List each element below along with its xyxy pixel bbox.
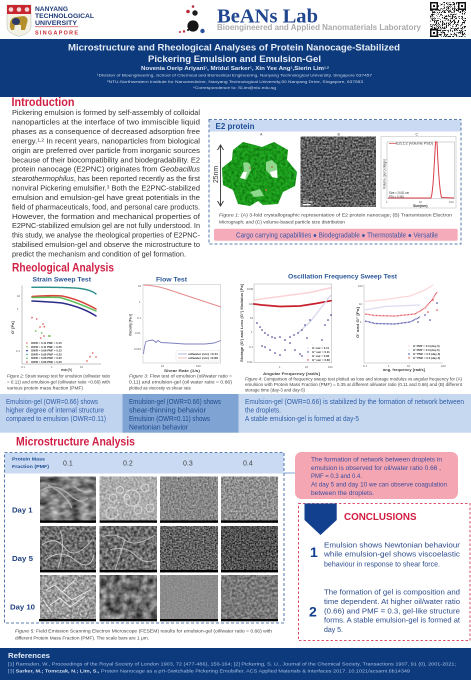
panel: flow test finding <box>122 394 238 433</box>
panel: oscillation finding <box>238 394 471 433</box>
panel: strain sweep finding <box>0 394 122 433</box>
text block: introduction: Both the E2PNC-stabilized <box>109 186 200 193</box>
text block: references: [1] Ramsden, W., Proceedings of the Royal Society of London 1903, 72 (477-486), 156-164; [2] Pickering, S. U., Journal of the Chemical Society, Transactions 1907, 91 (0), 2001-2021; <box>8 662 456 666</box>
text block: conclusion 1: while emulsion-gel shows viscoelastic <box>323 552 461 559</box>
caption: figure 3: 0.11) and emulsion-gel (oil water ratio = 0.66) <box>129 380 233 384</box>
callout: network formation: between the droplets. <box>311 490 374 497</box>
text block: conclusion 1: behaviour in response to shear force. <box>324 561 440 568</box>
chart: oscillation frequency sweep B: 1 <box>388 364 390 368</box>
callout: network formation <box>295 452 458 499</box>
chart: oscillation frequency sweep A: 10 <box>250 316 254 320</box>
text block: introduction: this study, we analyse the rheological properties of E2PNC- <box>12 233 201 240</box>
chart: oscillation frequency sweep B: G' and G'' [Pa] <box>355 306 360 338</box>
heading: Strain Sweep Test: Strain Sweep Test <box>32 276 92 284</box>
chart: oscillation frequency sweep A: Angular Frequency [rad/s] <box>263 371 321 376</box>
heading: Rheological Analysis: Rheological Analysis <box>12 262 114 274</box>
chart: oscillation frequency sweep B: 10 <box>359 302 363 306</box>
panel: strain sweep finding: higher degree of internal structure <box>6 407 104 414</box>
text block: introduction: phases as a consequence of decreased adsorption free <box>12 129 200 136</box>
authors: , Mridul Sarker <box>207 66 250 72</box>
chart: flow test: Shear Rate (1/s) <box>164 368 201 373</box>
chart: particle size distribution <box>381 136 456 208</box>
authors: 1 <box>250 66 252 70</box>
icon: 25nm size arrow: 25nm <box>213 166 220 183</box>
caption: figure 4: emulsion with Protein Mass Fraction (PMF) = 0.35 at different oil/water ratio (0.11 and 0.66) and (B) different <box>245 382 463 387</box>
logo: BeANs Lab: Bioengineered and Applied Nanomaterials Laboratory <box>217 23 422 32</box>
legend <box>304 344 332 362</box>
title <box>68 42 400 64</box>
text block: conclusion 1: Emulsion shows Newtonian behaviour <box>324 542 461 549</box>
panel: conclusions <box>298 504 470 640</box>
number: 1: 1 <box>310 544 318 560</box>
chart: oscillation frequency sweep A: 100 <box>328 365 333 369</box>
affiliations: *Correspondence to: SLim@ntu.edu.sg <box>193 85 276 90</box>
caption: figure 4: Figure 4: Comparison of frequency sweep test plotted as loss and storage modulus vs angular frequency for (A) <box>245 376 462 382</box>
affiliations: ²NTU-Northwestern Institute for Nanomedicine, Nanyang Technological University,50 Nanyang Drive, Singapore, 637553 <box>107 79 364 84</box>
caption: figure 5: different Protein Mass Fraction (PMF). The scale bars are 1 μm. <box>15 636 149 640</box>
legend <box>408 344 440 360</box>
logo: NTU Singapore: SINGAPORE <box>35 30 78 36</box>
text block: introduction: origin are preferred over particle from inorganic sources <box>12 148 201 155</box>
legend: oil/water (v/v) =0.11 <box>188 352 219 356</box>
panel: strain sweep finding: Emulsion-gel (OWR=0.66) shows <box>6 399 98 406</box>
legend: G' owr = 0.66 <box>312 354 330 358</box>
chart: strain sweep: 10 <box>80 365 84 369</box>
caption: figure 3 <box>129 374 233 390</box>
chart: oscillation frequency sweep A: 100 <box>249 302 254 306</box>
table header: Fraction (PMF) <box>12 464 50 469</box>
legend: OWR = 0.11 PMF = 0.15 <box>31 341 62 345</box>
chart: flow test <box>128 284 221 373</box>
table header <box>5 453 284 474</box>
text block: conclusion 2: day 5. <box>324 627 343 634</box>
chart: oscillation frequency sweep A: 0.1 <box>249 345 253 349</box>
caption: figure 1: Micrograph; and (C) volume-based particle size distribution <box>219 220 345 224</box>
text block: introduction: nanoparticles at the interface of two immiscible liquid <box>12 120 200 127</box>
panel: microstructure <box>4 452 284 623</box>
text block: introduction <box>12 110 201 258</box>
legend: G'' PMF = 0.3 (day-3) <box>413 352 440 356</box>
icon: 25nm size arrow <box>213 145 224 206</box>
chart: strain sweep: 1 <box>51 365 53 369</box>
caption: figure 1 <box>219 212 452 224</box>
panel: E2 protein <box>209 120 461 244</box>
text block: conclusion 1 <box>323 542 461 568</box>
caption: figure 3: Figure 3: Flow test of emulsion (oil/water ratio = <box>129 374 232 378</box>
panel: flow test finding: Emulsion-gel (OWR=0.66) shows <box>129 399 221 406</box>
affiliations: ¹Division of Bioengineering, School of Chemical and Biomedical Engineering, Nanyang Technological University, Singapore 637457 <box>97 72 373 78</box>
heading: CONCLUSIONS: CONCLUSIONS <box>344 512 417 523</box>
callout: network formation: The formation of network between droplets in <box>311 456 443 464</box>
header band <box>0 39 471 97</box>
label: A: A <box>260 132 263 136</box>
legend: OWR = 0.11 PMF = 0.35 <box>31 345 62 349</box>
legend <box>176 350 220 361</box>
chart: oscillation frequency sweep B: 0.1 <box>363 364 367 368</box>
chart: particle size distribution: Volume (percentage) <box>382 159 386 189</box>
legend: OWR = 0.66 PMF = 0.25 <box>31 352 62 356</box>
caption: figure 5 <box>15 628 272 640</box>
text block: references: [3] Sarker, M.; Tomczak, N.; Lim, S., Protein Nanocage as a pH-Switchable Pickering Emulsifier. ACS Applied Materials & Interfaces 2017. 10.1021/acsami.6b14349 <box>8 668 410 674</box>
text block: introduction: However, the formation and mechanical properties of <box>12 214 200 221</box>
legend <box>26 341 62 364</box>
chart: strain sweep: strain [%] <box>61 367 72 372</box>
chart: oscillation frequency sweep B <box>355 284 446 372</box>
text block: introduction: 1,2 <box>37 138 45 142</box>
chart: particle size distribution: 1 <box>386 200 388 204</box>
logo: NTU Singapore <box>7 5 94 36</box>
label: Day 5: Day 5 <box>12 554 33 563</box>
legend: OWR = 0.66 PMF = 0.15 <box>31 349 62 353</box>
legend: G' owr = 0.11 <box>312 346 330 350</box>
text block: introduction: protein nanocage (E2PNC) originates from Geobacillus <box>12 167 201 174</box>
heading: E2 protein: E2 protein <box>216 121 254 131</box>
caption: figure 1: Figure 1: (A) 3-fold crystallographic representation of E2 protein nanocage; (B) Transmission Electron <box>219 212 452 218</box>
image: TEM micrograph: 50 nm <box>303 200 313 204</box>
chart: oscillation frequency sweep B: 100 <box>358 284 363 288</box>
text block: conclusion 2: The formation of gel is composition and <box>324 590 460 597</box>
chart: particle size distribution: E2LC2 (Volume PSD) <box>396 142 433 146</box>
icon: E2 protein nanocage <box>222 142 297 206</box>
panel: flow test finding: Emulsion (OWR=0.11) shows <box>129 416 210 423</box>
arrow: to callout <box>284 470 304 476</box>
chart: flow test: Viscosity [Pa·s] <box>128 314 132 336</box>
callout: E2 properties <box>214 229 458 241</box>
chart: flow test: 10 <box>138 284 142 288</box>
panel: flow test finding: shear-thinning behavior <box>129 407 207 414</box>
SEM micrograph grid <box>39 477 278 621</box>
chart: particle size distribution: Size(nm) <box>413 204 428 208</box>
authors: Novenia Oerip Ariyani <box>141 66 195 72</box>
authors: 1,2 <box>324 66 329 70</box>
panel: oscillation finding: the droplets. <box>245 407 281 414</box>
caption: figure 2: various protein mass fraction (PMF) <box>7 386 83 390</box>
text block: introduction: predict the mechanism and condition of gel formation. <box>12 252 186 258</box>
label: B: B <box>338 132 340 136</box>
authors: 1 <box>205 66 208 70</box>
legend: oil/water (v/v) =0.66 <box>188 356 219 360</box>
text block: introduction: nonviral Pickering emulsifier. <box>12 186 101 193</box>
legend: G' PMF = 0.3 (day-3) <box>413 344 440 348</box>
chart: strain sweep: 10 <box>17 294 21 298</box>
panel: strain sweep finding: compared to emulsion (OWR=0.11) <box>6 416 106 423</box>
legend: G'' owr = 0.11 <box>312 350 330 354</box>
heading: Flow Test: Flow Test <box>156 276 188 284</box>
chart: oscillation frequency sweep A: 1 <box>279 365 281 369</box>
legend: G' PMF = 0.3 (day-5) <box>413 348 440 352</box>
chart: particle size distribution: Size = 24.81 nm <box>389 191 409 195</box>
chart: strain sweep: 0.1 <box>21 365 25 369</box>
chart: flow test: 100 <box>196 364 201 368</box>
caption: figure 4 <box>245 376 463 392</box>
text block: introduction: field of pharmaceuticals, food, and personal care products. <box>12 204 200 211</box>
icon: pentagon marker <box>304 504 337 535</box>
label: Day 1: Day 1 <box>12 506 32 514</box>
caption: figure 2: = 0.11) and emulsion-gel (oil/water ratio =0.66) with <box>7 380 110 384</box>
legend: G'' PMF = 0.3 (day-5) <box>413 356 440 360</box>
caption: figure 2: Figure 2: Strain sweep test for emulsion (oil/water ratio <box>7 374 110 378</box>
chart: flow test: 0.001 <box>134 347 141 351</box>
chart: oscillation frequency sweep B: ang. frequency [rad/s] <box>383 367 426 372</box>
text block: introduction: emulsion and emulsion-gel have great potentials in the <box>12 195 200 202</box>
heading: Oscillation Frequency Sweep Test: Oscillation Frequency Sweep Test <box>288 274 398 280</box>
table header: 0.2 <box>123 460 133 468</box>
table header: 0.3 <box>183 460 193 468</box>
caption: figure 3: plotted as viscosity vs shear rate <box>129 386 191 390</box>
logo: BeANs Lab <box>179 5 422 33</box>
table header: 0.1 <box>63 460 73 468</box>
title: Pickering Emulsion and Emulsion-Gel <box>148 54 321 64</box>
text block: introduction: Pickering emulsion is formed by self-assembly of colloidal <box>12 110 200 117</box>
logo: NTU Singapore: NANYANG <box>35 6 68 13</box>
chart: particle size distribution: 10 <box>419 200 423 204</box>
callout: network formation: At day 5 and day 10 we can observe coagulation <box>311 482 447 488</box>
logo: NTU Singapore: TECHNOLOGICAL <box>35 13 94 20</box>
chart: oscillation frequency sweep A <box>239 283 333 376</box>
chart: flow test: 0.1 <box>137 316 141 320</box>
chart: oscillation frequency sweep B: 10 <box>407 364 411 368</box>
heading: Microstructure Analysis: Microstructure Analysis <box>16 437 135 449</box>
table header: Protein Mass <box>12 456 46 462</box>
chart: strain sweep: 1 <box>17 307 19 311</box>
text block: conclusion 2: forms. A stable emulsion-gel is formed at <box>324 618 460 625</box>
legend: G'' owr = 0.66 <box>312 358 330 362</box>
icon: QR code <box>430 2 466 37</box>
chart: strain sweep <box>10 286 101 372</box>
icon: molecules <box>179 5 205 33</box>
callout: network formation: emulsion is observed for oil/water ratio 0.66 , <box>311 465 441 472</box>
chart: flow test: 10 <box>161 364 165 368</box>
caption: figure 4: storage time (day-3 and day-5) <box>245 388 305 392</box>
heading: References: References <box>8 651 50 660</box>
chart: oscillation frequency sweep B: 100 <box>441 364 446 368</box>
text block: introduction: because of their biocompatibility and biodegradability. E2 <box>12 157 200 164</box>
chart: flow test: 1 <box>139 300 141 304</box>
caption: figure 5: Figure 5: Field Emission Scanning Electron Microscope (FESEM) results for emulsion-gel (oil/water ratio = 0.66) with <box>15 628 272 634</box>
text block: introduction: In recent years, nanoparticles from biological <box>44 138 200 146</box>
table header: 0.4 <box>243 460 253 468</box>
legend: OWR = 0.66 PMF = 0.35 <box>31 356 62 360</box>
authors: 1 <box>291 66 293 70</box>
text block: introduction: stearothermophilus , has been reported recently as the first <box>12 176 200 183</box>
text block: conclusion 2 <box>324 590 460 634</box>
chart: particle size distribution: 100 <box>449 200 454 204</box>
text block: conclusion 2: (0.66) and PMF = 0.3, gel-like structure <box>324 608 460 615</box>
text block: introduction: E2PNC-stabilized emulsion gel are not fully understood. In <box>12 223 200 230</box>
logo: BeANs Lab: BeANs Lab <box>217 6 318 28</box>
panel: oscillation finding: A stable emulsion-gel is formed at day-5 <box>245 416 359 423</box>
chart: flow test: 0.01 <box>135 331 141 335</box>
number: 2: 2 <box>309 604 317 620</box>
callout: network formation: PMF = 0.3 and 0.4. <box>311 473 362 480</box>
heading: Introduction: Introduction <box>12 97 74 109</box>
label: C: C <box>416 132 418 136</box>
chart: oscillation frequency sweep A: 1 <box>251 330 253 334</box>
panel: references <box>0 648 471 680</box>
chart: oscillation frequency sweep A: Storage (G') and Loss (G'') Modulus [Pa] <box>239 283 244 362</box>
text block: introduction: energy. <box>12 138 35 146</box>
chart: oscillation frequency sweep B: 1 <box>360 320 362 324</box>
chart: strain sweep: G' [Pa] <box>10 321 15 334</box>
text block: references <box>8 662 456 674</box>
affiliations <box>97 72 373 90</box>
text block: introduction: 3 <box>107 185 110 190</box>
image: TEM micrograph <box>301 137 376 207</box>
label: Day 10: Day 10 <box>10 602 35 612</box>
authors: , Xin Yee Ang <box>252 66 291 72</box>
authors: ,Sierin Lim <box>293 66 324 72</box>
panel: flow test finding: Newtonian behavior <box>129 424 189 431</box>
chart: oscillation frequency sweep A: 0.01 <box>247 360 253 364</box>
chart: particle size distribution: PDI = 0.381 <box>389 195 404 199</box>
caption: figure 2 <box>7 374 110 390</box>
legend: OWR = 0.66 PMF = 0.45 <box>31 360 62 364</box>
title: Microstructure and Rheological Analyses of Protein Nanocage-Stabilized <box>68 42 400 52</box>
text block: introduction: stabilised emulsion-gel and observe the microstructure to <box>12 242 200 249</box>
chart: oscillation frequency sweep A: 10 <box>305 365 309 369</box>
callout: E2 properties: Cargo carrying capabilities ● Biodegradable ● Thermostable ● Versatile <box>236 232 438 239</box>
logo: NTU Singapore: UNIVERSITY <box>35 20 78 27</box>
chart: oscillation frequency sweep A: 1000 <box>247 287 254 291</box>
icon: NTU shield <box>7 5 31 36</box>
chart: strain sweep: 0.1 <box>16 349 20 353</box>
text block: conclusion 2: time dependent. At higher oil/water ratio <box>324 599 460 606</box>
